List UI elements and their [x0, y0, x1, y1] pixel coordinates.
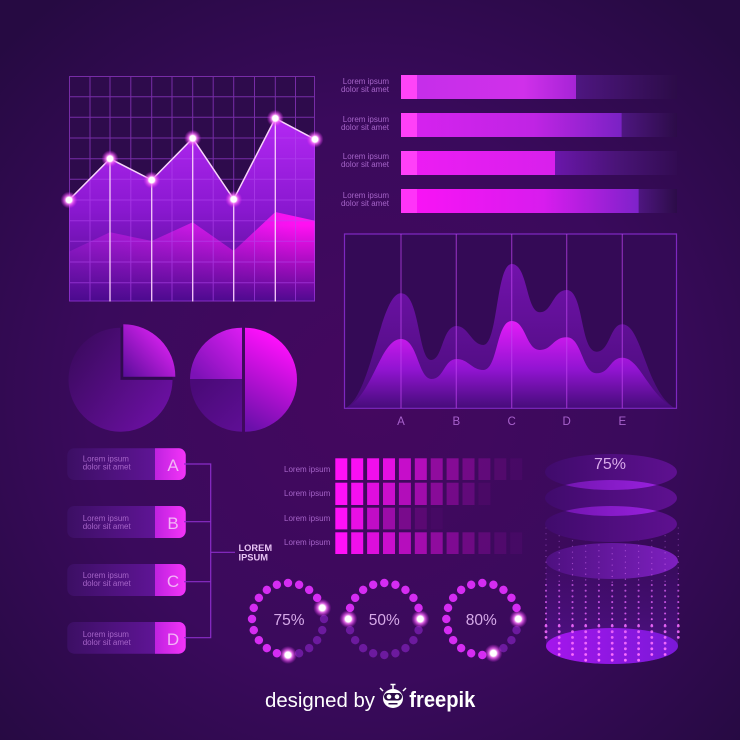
floating disc — [546, 543, 678, 579]
connector lines — [184, 464, 235, 638]
progress ring 50%: 50% — [369, 612, 400, 629]
stacked discs — [545, 506, 677, 542]
bar row 3 — [341, 151, 677, 175]
data points — [60, 110, 324, 208]
icon: robot mascot — [380, 684, 406, 708]
trend line — [69, 118, 315, 200]
square row 3 — [335, 508, 443, 529]
freepik credit: freepik — [409, 687, 476, 712]
dot columns — [546, 528, 678, 662]
axis labels: A — [397, 416, 405, 428]
card C: Lorem ipsum — [83, 571, 129, 580]
card B: B — [167, 514, 179, 533]
panel: lettered list with connector — [67, 448, 272, 654]
card B: dolor sit amet — [83, 522, 131, 531]
progress ring 80% — [442, 579, 527, 665]
bar row 2: Lorem ipsum — [343, 115, 389, 124]
row labels: Lorem ipsum — [284, 489, 331, 498]
connector label — [238, 543, 272, 562]
axis labels: D — [563, 416, 571, 428]
card C — [67, 564, 186, 596]
card A: A — [167, 456, 179, 475]
frame and gridlines — [344, 234, 676, 408]
bar row 4 — [341, 189, 677, 213]
drop lines — [110, 118, 275, 302]
progress ring 50% — [339, 579, 429, 659]
pie chart right — [190, 328, 297, 432]
bar row 4: Lorem ipsum — [343, 191, 389, 200]
panel: horizontal bars — [341, 75, 677, 213]
panel: line and area chart — [60, 76, 324, 302]
card A: Lorem ipsum — [83, 454, 129, 464]
card C: C — [167, 572, 179, 591]
row labels: Lorem ipsum — [284, 538, 331, 547]
connector label: IPSUM — [238, 552, 268, 562]
bar row 1 — [341, 75, 677, 99]
square row 1 — [335, 458, 522, 480]
square row 4 — [335, 532, 522, 554]
panel: square progress matrix — [284, 458, 522, 554]
card D: D — [167, 630, 179, 649]
axis labels — [397, 416, 626, 428]
card C: dolor sit amet — [83, 579, 131, 588]
freepik credit — [265, 684, 476, 712]
connector label: LOREM — [238, 543, 272, 553]
card D: Lorem ipsum — [83, 630, 129, 639]
axis labels: C — [508, 416, 516, 428]
bar row 1: Lorem ipsum — [343, 77, 389, 86]
back curve — [345, 264, 675, 408]
bar row 3: dolor sit amet — [341, 160, 390, 169]
square row 2 — [335, 483, 490, 505]
card A — [67, 448, 186, 480]
bar row 2: dolor sit amet — [341, 123, 390, 132]
bar row 4: dolor sit amet — [341, 199, 390, 208]
front curve — [345, 321, 675, 408]
progress ring 80%: 80% — [466, 612, 497, 629]
axis labels: E — [618, 416, 626, 428]
panel: layered cylinder — [545, 454, 678, 664]
progress ring 75% — [248, 579, 334, 664]
axis labels: B — [452, 416, 460, 428]
rear area series — [69, 118, 315, 302]
row labels: Lorem ipsum — [284, 465, 331, 474]
pie chart left — [68, 324, 175, 432]
row labels — [284, 465, 331, 547]
base disc — [546, 628, 678, 664]
panel: smooth area chart — [344, 234, 676, 428]
cylinder body — [546, 561, 678, 664]
bar row 3: Lorem ipsum — [343, 152, 389, 161]
card D: dolor sit amet — [83, 638, 131, 647]
bar row 2 — [341, 113, 677, 137]
progress ring 75%: 75% — [273, 612, 305, 629]
freepik credit: designed by — [265, 689, 376, 712]
front area series — [69, 212, 315, 302]
bar row 1: dolor sit amet — [341, 85, 390, 94]
card D — [67, 622, 186, 654]
card B — [67, 506, 186, 538]
row labels: Lorem ipsum — [284, 514, 331, 523]
card B: Lorem ipsum — [83, 514, 129, 523]
card A: dolor sit amet — [83, 462, 131, 472]
cylinder percentage: 75% — [594, 456, 626, 473]
